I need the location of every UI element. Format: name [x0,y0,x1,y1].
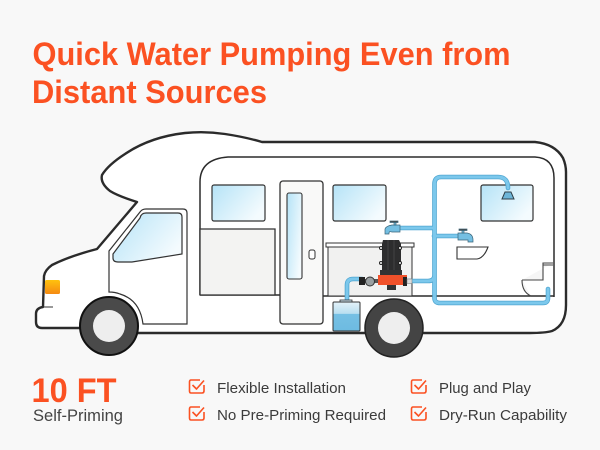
feature: Dry-Run Capability: Dry-Run Capability [439,407,568,424]
pump foot [387,285,396,290]
icon: check [190,407,204,420]
pump collar [380,270,402,275]
front wheel [80,297,138,355]
counter [326,243,414,296]
bumper line [43,306,53,308]
icon: check [412,407,426,420]
living area outline [200,157,554,297]
title [32,36,510,110]
icon: check [412,380,426,393]
faucet left [385,221,400,234]
pump bolts [380,246,402,264]
floor line [200,295,554,296]
icon: check [190,380,204,393]
title: Distant Sources [32,74,267,110]
headlight [45,280,60,294]
door handle [309,250,315,259]
title: Quick Water Pumping Even from [32,36,510,72]
RV body outline [36,132,566,333]
feature: Plug and Play: Plug and Play [439,380,531,397]
pump red base [378,275,407,285]
spec: 10 FT: 10 FT [32,372,117,410]
water tank [333,300,360,331]
cab window [113,213,182,262]
spec: 10 FT: Self-Priming [33,407,123,425]
pump body [382,240,401,270]
toilet [522,263,553,296]
cab door [109,209,187,324]
lower cabinet [200,229,275,295]
pump [359,240,412,290]
right connector [403,277,412,286]
window 1 [212,185,265,221]
feature: Flexible Installation: Flexible Installation [217,380,346,397]
left connector [359,277,378,286]
RV illustration [36,132,566,357]
water pipes [347,177,548,303]
sink basin [457,247,488,259]
feature: No Pre-Priming Required: No Pre-Priming Required [217,407,386,424]
entry door [280,181,323,324]
door window [287,193,302,279]
shower head [502,192,514,199]
spec: 10 FT [32,372,123,425]
features list [190,380,568,424]
rear wheel [365,299,423,357]
window 3 [481,185,533,221]
faucet right [458,229,473,242]
window 2 [333,185,386,221]
